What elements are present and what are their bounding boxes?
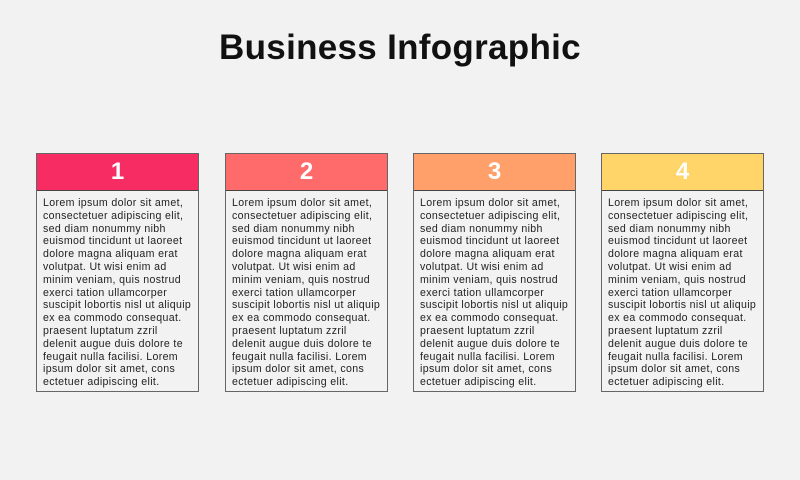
panel: card 2	[225, 153, 388, 392]
text block 3: suscipit lobortis nisl ut aliquip	[420, 299, 568, 311]
text block 2: volutpat. Ut wisi enim ad	[232, 261, 356, 273]
text block 4: sed diam nonummy nibh	[608, 223, 731, 235]
text block 2: consectetuer adipiscing elit,	[232, 210, 372, 222]
text block 2: minim veniam, quis nostrud	[232, 274, 370, 286]
text block 3	[420, 197, 568, 388]
text block 1: exerci tation ullamcorper	[43, 287, 167, 299]
header 1: 1	[111, 158, 124, 185]
text block 3: euismod tincidunt ut laoreet	[420, 235, 559, 247]
text block 3: minim veniam, quis nostrud	[420, 274, 558, 286]
text block 4: euismod tincidunt ut laoreet	[608, 235, 747, 247]
text block 4: suscipit lobortis nisl ut aliquip	[608, 299, 756, 311]
text block 1: euismod tincidunt ut laoreet	[43, 235, 182, 247]
text block 3: sed diam nonummy nibh	[420, 223, 543, 235]
text block 2: ectetuer adipiscing elit.	[232, 376, 349, 388]
text block 4: consectetuer adipiscing elit,	[608, 210, 748, 222]
text block 4: ex ea commodo consequat.	[608, 312, 747, 324]
panel: card 1	[36, 153, 199, 392]
text block 1	[43, 197, 191, 388]
text block 3: dolore magna aliquam erat	[420, 248, 555, 260]
text block 4: ipsum dolor sit amet, cons	[608, 363, 740, 375]
text block 3: praesent luptatum zzril	[420, 325, 535, 337]
text block 1: volutpat. Ut wisi enim ad	[43, 261, 167, 273]
panel: card 4	[601, 153, 764, 392]
text block 2: exerci tation ullamcorper	[232, 287, 356, 299]
panel: card 3	[413, 153, 576, 392]
header 3	[414, 154, 575, 191]
text block 4: ectetuer adipiscing elit.	[608, 376, 725, 388]
text block 4	[608, 197, 756, 388]
text block 2: dolore magna aliquam erat	[232, 248, 367, 260]
text block 2: Lorem ipsum dolor sit amet,	[232, 197, 372, 209]
text block 2: ipsum dolor sit amet, cons	[232, 363, 364, 375]
text block 4: exerci tation ullamcorper	[608, 287, 732, 299]
header 4	[602, 154, 763, 191]
text block 3: ectetuer adipiscing elit.	[420, 376, 537, 388]
text block 4: minim veniam, quis nostrud	[608, 274, 746, 286]
text block 1: dolore magna aliquam erat	[43, 248, 178, 260]
text block 2: delenit augue duis dolore te	[232, 338, 372, 350]
text block 3: exerci tation ullamcorper	[420, 287, 544, 299]
text block 4: feugait nulla facilisi. Lorem	[608, 351, 743, 363]
text block 2: sed diam nonummy nibh	[232, 223, 355, 235]
text block 4: delenit augue duis dolore te	[608, 338, 748, 350]
text block 4: Lorem ipsum dolor sit amet,	[608, 197, 748, 209]
text block 1: ex ea commodo consequat.	[43, 312, 182, 324]
text block 3: Lorem ipsum dolor sit amet,	[420, 197, 560, 209]
text block 3: ipsum dolor sit amet, cons	[420, 363, 552, 375]
header 4: 4	[676, 158, 689, 185]
title: Business Infographic	[219, 28, 581, 67]
text block 2: praesent luptatum zzril	[232, 325, 347, 337]
text block 1: suscipit lobortis nisl ut aliquip	[43, 299, 191, 311]
text block 1: ipsum dolor sit amet, cons	[43, 363, 175, 375]
text block 4: dolore magna aliquam erat	[608, 248, 743, 260]
text block 1: minim veniam, quis nostrud	[43, 274, 181, 286]
text block 3: volutpat. Ut wisi enim ad	[420, 261, 544, 273]
text block 1: feugait nulla facilisi. Lorem	[43, 351, 178, 363]
text block 2	[232, 197, 380, 388]
header 1	[37, 154, 198, 191]
text block 1: sed diam nonummy nibh	[43, 223, 166, 235]
text block 3: delenit augue duis dolore te	[420, 338, 560, 350]
text block 1: delenit augue duis dolore te	[43, 338, 183, 350]
text block 1: praesent luptatum zzril	[43, 325, 158, 337]
text block 1: ectetuer adipiscing elit.	[43, 376, 160, 388]
text block 3: feugait nulla facilisi. Lorem	[420, 351, 555, 363]
text block 2: feugait nulla facilisi. Lorem	[232, 351, 367, 363]
text block 2: ex ea commodo consequat.	[232, 312, 371, 324]
text block 1: consectetuer adipiscing elit,	[43, 210, 183, 222]
text block 2: euismod tincidunt ut laoreet	[232, 235, 371, 247]
text block 2: suscipit lobortis nisl ut aliquip	[232, 299, 380, 311]
header 2: 2	[300, 158, 313, 185]
header 2	[226, 154, 387, 191]
text block 3: ex ea commodo consequat.	[420, 312, 559, 324]
text block 3: consectetuer adipiscing elit,	[420, 210, 560, 222]
header 3: 3	[488, 158, 501, 185]
text block 1: Lorem ipsum dolor sit amet,	[43, 197, 183, 209]
text block 4: volutpat. Ut wisi enim ad	[608, 261, 732, 273]
text block 4: praesent luptatum zzril	[608, 325, 723, 337]
